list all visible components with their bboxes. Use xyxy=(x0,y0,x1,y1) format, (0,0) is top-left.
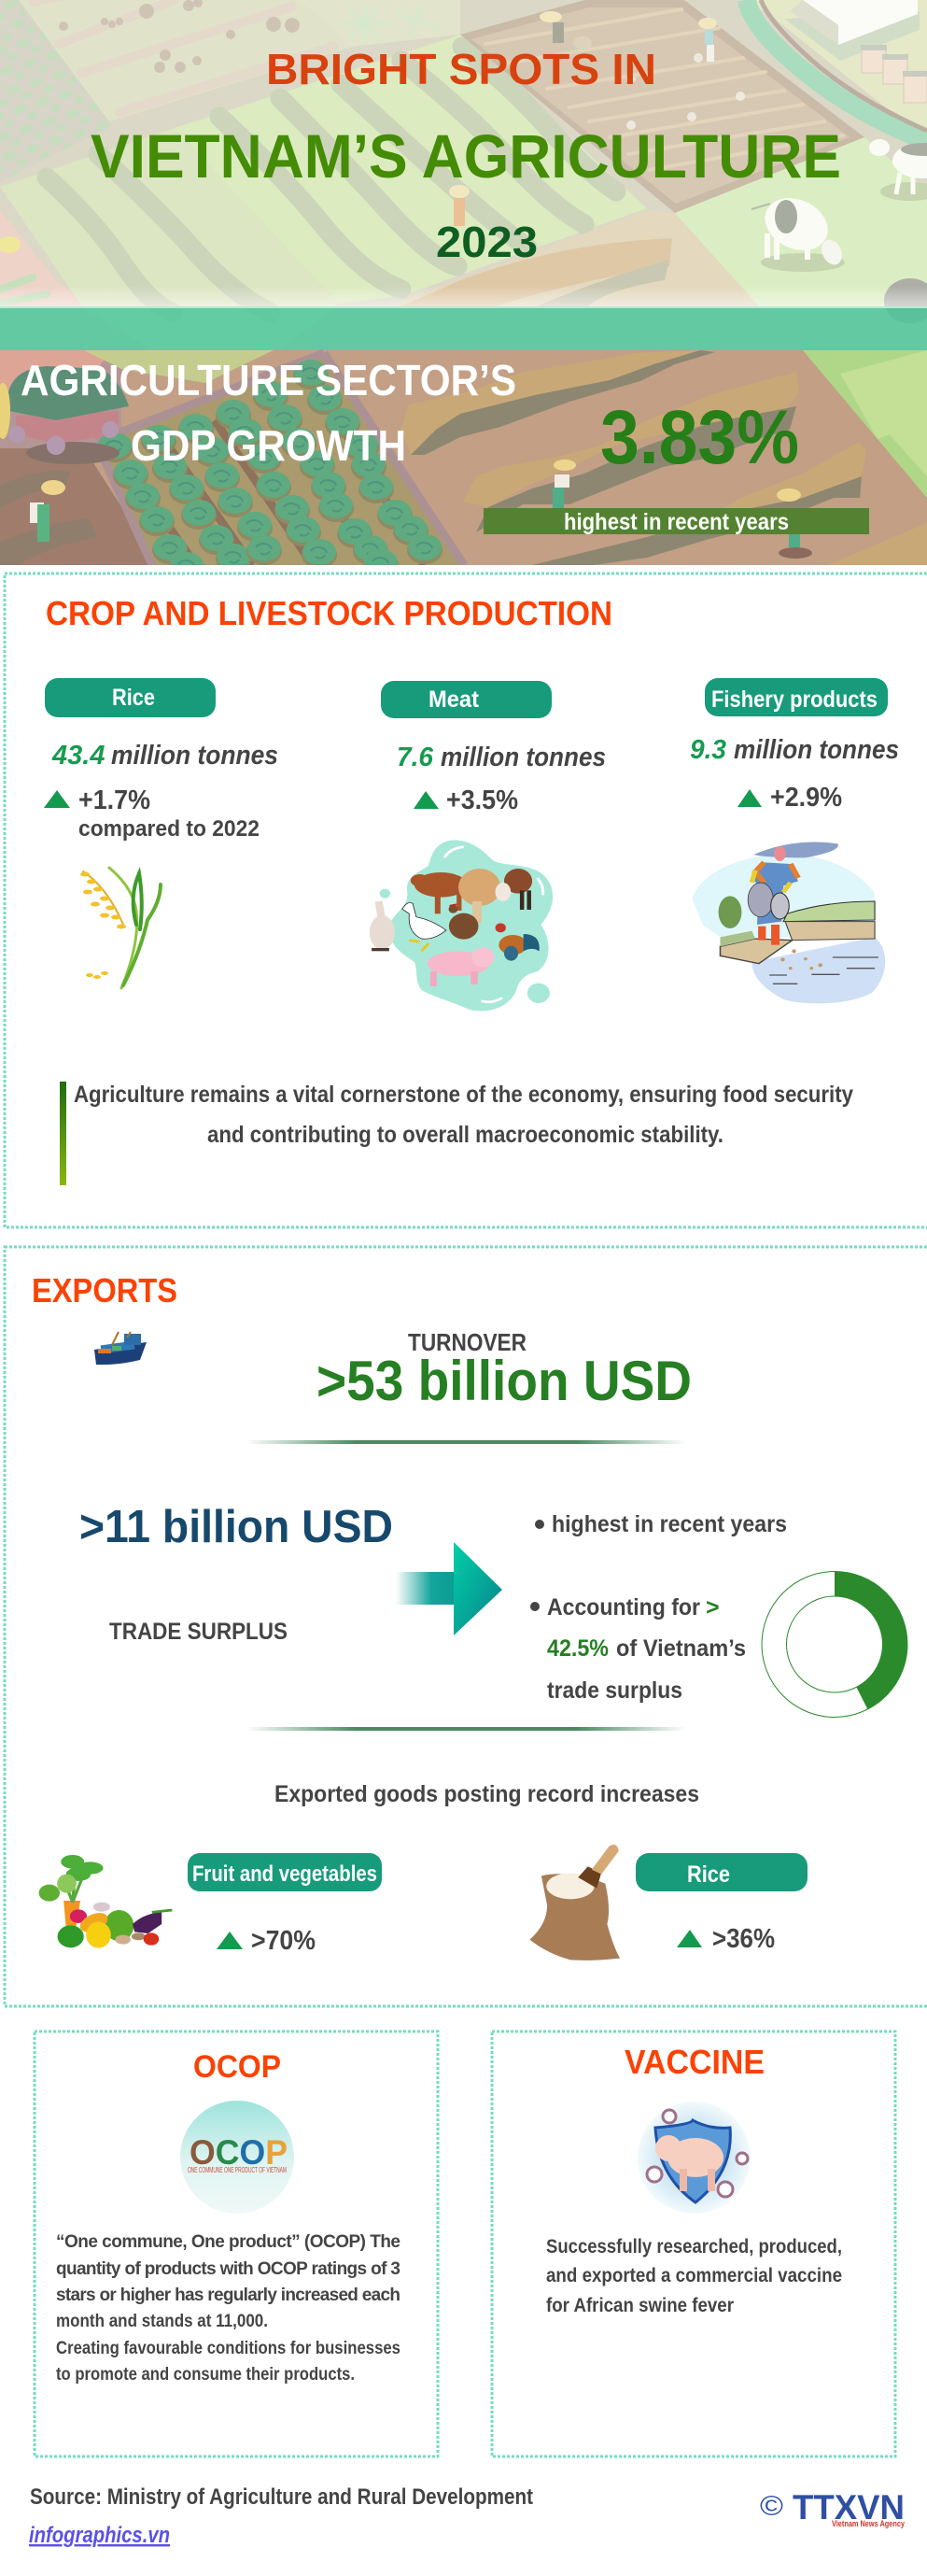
cows xyxy=(751,139,927,323)
column: meat xyxy=(370,681,606,1011)
subheading: record increases: Exported goods posting record increases xyxy=(274,1781,699,1807)
icon: rice sack xyxy=(529,1845,620,1960)
farmers, lower xyxy=(30,480,65,542)
greenhouse xyxy=(784,0,920,61)
icon: fish farmer at pond xyxy=(692,842,885,1003)
icon: vegetables xyxy=(39,1855,172,1948)
lower fields xyxy=(93,350,927,565)
bullet: accounting for share: Accounting for xyxy=(547,1594,700,1621)
heading: agriculture sector's GDP growth: GDP GROWTH xyxy=(131,421,406,470)
item: rice export: Rice xyxy=(687,1861,730,1888)
panel: crop and livestock production xyxy=(5,573,927,1227)
column: fishery products: Fishery products xyxy=(711,686,878,713)
farmers, upper xyxy=(540,11,592,50)
bullet: accounting for share: > xyxy=(706,1594,720,1621)
badge: highest in recent years xyxy=(484,508,869,535)
stat: trade surplus: >11 billion USD xyxy=(79,1502,393,1552)
item: fruit and vegetables: >70% xyxy=(251,1926,316,1956)
title: bright spots in: BRIGHT SPOTS IN xyxy=(266,45,656,93)
icon: livestock on blob xyxy=(370,840,553,1011)
item: fruit and vegetables xyxy=(39,1853,382,1956)
heading: VACCINE xyxy=(625,2043,765,2081)
hero panel: title and GDP growth xyxy=(0,0,927,582)
text block: to promote and consume their products. xyxy=(56,2365,355,2385)
column: meat: Meat xyxy=(428,686,480,713)
text block: quantity of products with OCOP ratings of 3 xyxy=(56,2259,400,2279)
text block: Successfully researched, produced, xyxy=(546,2236,842,2258)
text block: stars or higher has regularly increased each xyxy=(56,2286,400,2305)
item: rice export xyxy=(529,1845,808,1960)
teal band xyxy=(0,306,927,350)
column: fishery products: +2.9% xyxy=(770,783,842,813)
column: fishery products: 9.3 xyxy=(690,735,726,765)
column: meat: +3.5% xyxy=(446,786,518,815)
source line: Source: Ministry of Agriculture and Rural Development xyxy=(30,2484,533,2510)
item: rice export: >36% xyxy=(712,1924,775,1954)
heading: EXPORTS xyxy=(32,1271,177,1309)
bullet: accounting for share: of Vietnam’s xyxy=(616,1635,746,1662)
icon: cargo ship xyxy=(94,1332,147,1365)
column: rice: Rice xyxy=(112,685,155,711)
text block: Creating favourable conditions for businesses xyxy=(56,2339,400,2358)
stat: turnover: TURNOVER xyxy=(408,1328,527,1356)
text block xyxy=(56,2232,400,2385)
panel: OCOP xyxy=(35,2031,438,2456)
icon: pig in shield xyxy=(638,2102,751,2214)
heading: agriculture sector's GDP growth: AGRICULTURE SECTOR’S xyxy=(21,356,516,404)
column: rice xyxy=(44,678,278,988)
icon: OCOP logo: OCOP xyxy=(190,2133,288,2172)
heading: CROP AND LIVESTOCK PRODUCTION xyxy=(46,594,612,632)
bullet: highest in recent years: highest in recent years xyxy=(552,1511,787,1537)
item: fruit and vegetables: Fruit and vegetables xyxy=(192,1861,377,1887)
logo: TTXVN: Vietnam News Agency xyxy=(832,2519,905,2528)
panel: exports xyxy=(5,1247,927,2006)
wagon xyxy=(0,366,129,464)
big number: GDP growth: 3.83% xyxy=(600,395,799,480)
text block xyxy=(546,2236,842,2316)
stat: trade surplus xyxy=(79,1502,393,1645)
bullet: accounting for share xyxy=(530,1594,746,1704)
callout: agriculture cornerstone xyxy=(60,1082,853,1185)
column: fishery products xyxy=(690,678,899,1003)
icon: OCOP logo xyxy=(180,2101,294,2214)
text block: month and stands at 11,000. xyxy=(56,2312,268,2331)
stat: trade surplus: TRADE SURPLUS xyxy=(109,1619,288,1645)
logo: TTXVN: TTXVN xyxy=(793,2488,905,2526)
column: rice: 43.4 xyxy=(51,741,105,771)
column: rice: million tonnes xyxy=(111,741,278,771)
column: meat: million tonnes xyxy=(441,743,606,772)
title: year: 2023 xyxy=(436,218,538,266)
callout: agriculture cornerstone: and contributing to overall macroeconomic stability. xyxy=(207,1122,723,1148)
donut chart: 42.5% xyxy=(762,1571,907,1717)
text block: for African swine fever xyxy=(546,2295,734,2316)
column: rice: compared to 2022 xyxy=(78,816,260,842)
bullet: accounting for share: trade surplus xyxy=(547,1677,682,1704)
bullet: accounting for share: 42.5% xyxy=(547,1635,609,1662)
stat: turnover xyxy=(316,1328,692,1412)
column: rice: +1.7% xyxy=(78,786,150,815)
arrow xyxy=(396,1542,502,1635)
text block: “One commune, One product” (OCOP) The xyxy=(56,2232,400,2252)
beehives xyxy=(861,45,927,103)
text block: and exported a commercial vaccine xyxy=(546,2265,842,2286)
column: fishery products: million tonnes xyxy=(734,735,899,765)
logo: TTXVN: © xyxy=(760,2491,783,2522)
ridges xyxy=(401,350,700,455)
icon: OCOP logo: ONE COMMUNE ONE PRODUCT OF VIETNAM xyxy=(188,2166,287,2174)
icon: rice plant xyxy=(80,868,161,988)
heading: OCOP xyxy=(193,2049,281,2085)
heading: agriculture sector's GDP growth xyxy=(21,356,516,470)
panel: vaccine xyxy=(492,2031,895,2456)
website link text: infographics.vn xyxy=(29,2523,170,2548)
background farm illustration xyxy=(0,0,927,582)
column: meat: 7.6 xyxy=(397,743,434,772)
badge: highest in recent years: highest in recent years xyxy=(564,509,789,535)
title: Vietnam's agriculture: VIETNAM’S AGRICULTURE xyxy=(91,121,841,191)
white fade above band xyxy=(0,290,927,306)
stat: turnover: >53 billion USD xyxy=(316,1350,692,1412)
callout: agriculture cornerstone: Agriculture remains a vital cornerstone of the economy, ensuring food security xyxy=(74,1082,853,1108)
